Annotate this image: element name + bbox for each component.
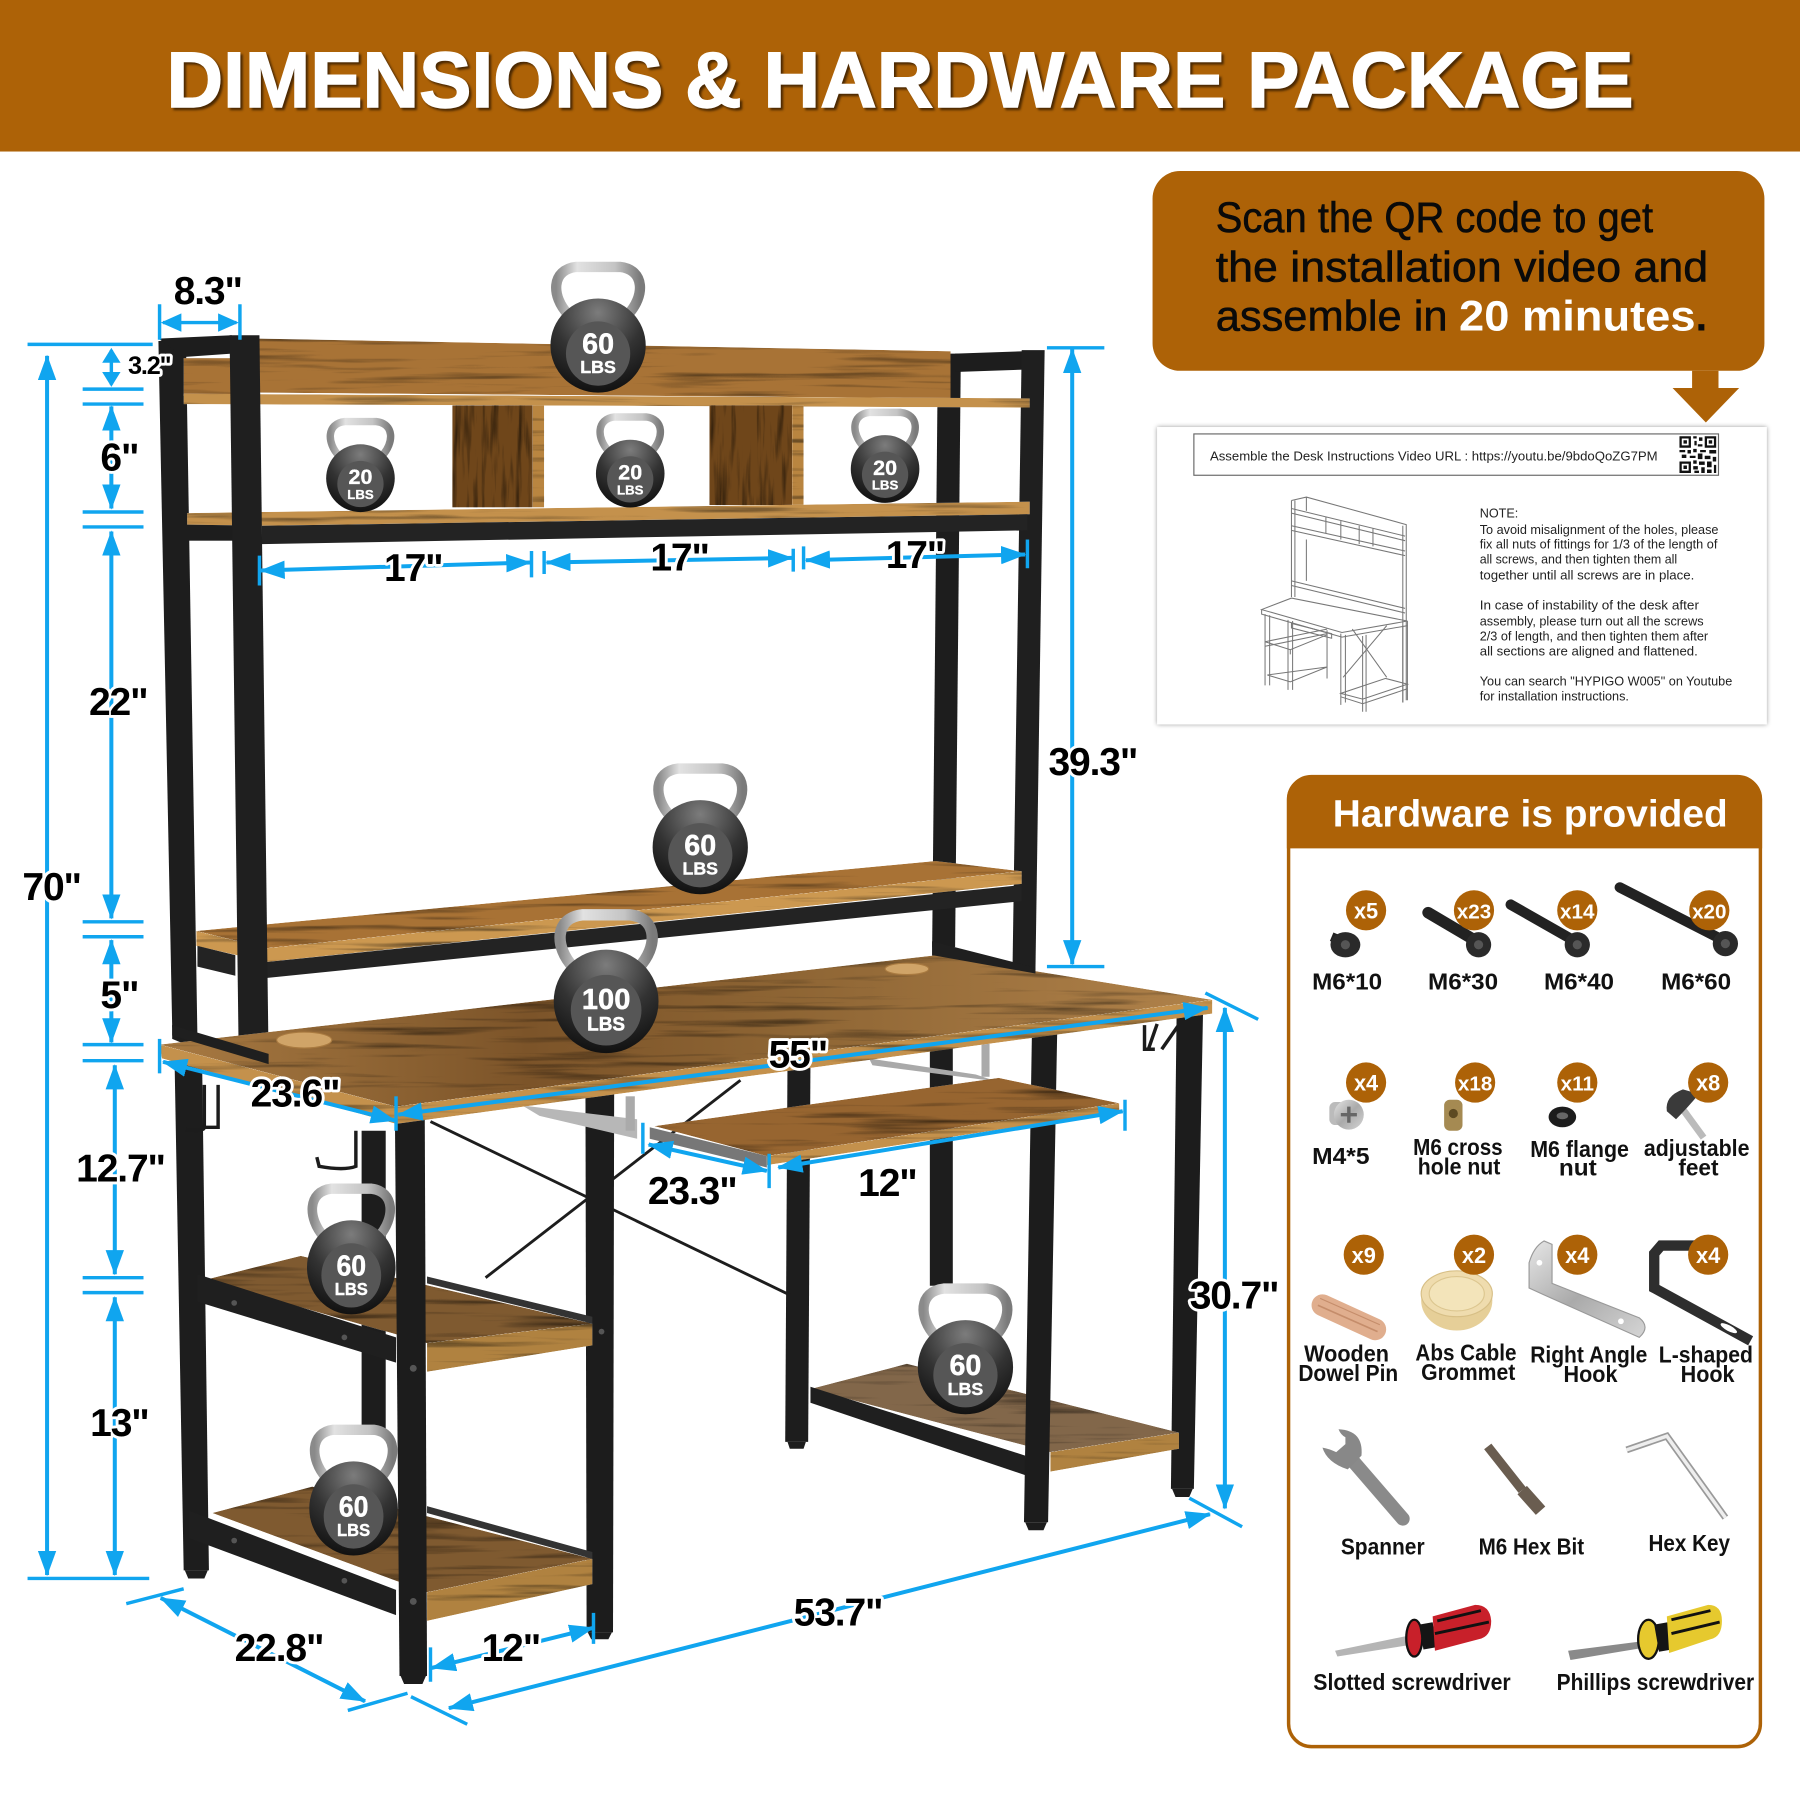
rear desk legs	[362, 1039, 953, 1449]
item: M6 cross hole nut	[1413, 1062, 1503, 1179]
lower left shelf	[189, 1487, 592, 1621]
item: L-shaped hook: Hook	[1681, 1361, 1735, 1387]
item: M6 hex bit	[1479, 1446, 1585, 1559]
item: M6 flange nut: x11	[1561, 1073, 1594, 1096]
kettlebell: 60 lbs top	[550, 267, 646, 393]
kettlebell: 60 lbs upper left shelf: LBS	[335, 1278, 368, 1299]
kettlebell: 60 lbs hutch shelf: 60	[684, 830, 716, 862]
dimension 12.7 in: 12.7"	[76, 1147, 165, 1190]
kettlebell: 20 lbs left: LBS	[347, 487, 374, 502]
kettlebell: 60 lbs upper left shelf: 60	[336, 1249, 366, 1282]
dimension 12 in shelf depth: 12"	[482, 1627, 540, 1670]
item: M6 cross hole nut: hole nut	[1418, 1153, 1501, 1179]
item: M6x40 bolt: x14	[1560, 900, 1595, 923]
kettlebell: 60 lbs right shelf: LBS	[948, 1379, 983, 1399]
dimension 55 in	[396, 1008, 1208, 1131]
note text: 2/3 of length, and then tighten them after	[1480, 630, 1708, 644]
item: abs cable grommet: x2	[1462, 1243, 1486, 1268]
callout: scan QR code: assemble in	[1216, 293, 1448, 340]
dimension 23.3 in: 23.3"	[648, 1170, 737, 1213]
item: spanner	[1322, 1429, 1425, 1559]
kettlebell: 60 lbs hutch shelf	[653, 769, 748, 894]
dimension 17 in right	[806, 534, 1027, 577]
item: wooden dowel pin: x9	[1352, 1243, 1376, 1268]
note text: assembly, please turn out all the screws	[1480, 615, 1704, 629]
item: M6x10 bolt	[1312, 890, 1386, 995]
item: right angle hook	[1529, 1235, 1647, 1387]
kettlebell: 20 lbs middle	[596, 417, 665, 507]
hutch front left post	[230, 335, 269, 1062]
dimension 22.8 in	[126, 1589, 408, 1710]
cubby dividers	[452, 405, 804, 507]
item: adjustable feet: feet	[1678, 1155, 1719, 1181]
middle and far right desk legs	[585, 1010, 1203, 1639]
item: M6 flange nut	[1530, 1062, 1629, 1181]
item: M6x10 bolt: x5	[1354, 898, 1378, 923]
kettlebell: 20 lbs right: 20	[873, 456, 897, 480]
right lower shelf	[810, 1364, 1179, 1475]
dimension 3.2 in: 3.2"	[128, 352, 171, 380]
kettlebell: 20 lbs right: LBS	[872, 478, 898, 493]
kettlebell: 60 lbs right shelf: 60	[949, 1350, 981, 1382]
dimension 5 in	[83, 940, 143, 1061]
item: L-shaped hook	[1654, 1235, 1753, 1387]
keyboard slide rails	[522, 1042, 996, 1139]
item: abs cable grommet	[1415, 1235, 1516, 1385]
item: wooden dowel pin	[1298, 1235, 1398, 1386]
panel: installation note card	[1157, 427, 1767, 724]
hutch base bar	[172, 941, 1035, 1064]
note text: together until all screws are in place.	[1480, 569, 1694, 583]
item: M6x40 bolt: M6*40	[1544, 969, 1614, 995]
arrow: callout to note card	[1673, 371, 1739, 422]
dimension 22 in: 22"	[89, 681, 147, 724]
item: M6 flange nut: nut	[1559, 1155, 1597, 1181]
dimension 70 in overall height: 70"	[22, 866, 81, 909]
dimension 17 in left: 17"	[384, 547, 442, 590]
item: M6 cross hole nut: M6 cross	[1413, 1134, 1503, 1160]
hutch lower shelf	[196, 861, 1022, 978]
dimension 17 in middle	[546, 537, 804, 580]
video URL box: Assemble the Desk Instructions Video URL : https://youtu.be/9bdoQoZG7PM	[1210, 448, 1658, 463]
kettlebell: 100 lbs desktop	[554, 915, 659, 1053]
item: spanner: Spanner	[1341, 1533, 1425, 1559]
hutch middle shelf	[187, 502, 1030, 526]
dimension lines and labels	[22, 270, 1278, 1724]
item: hex key	[1627, 1436, 1730, 1556]
dimension 70 in overall height	[22, 344, 153, 1578]
desk illustration	[158, 267, 1212, 1684]
dimension 22.8 in: 22.8"	[235, 1627, 323, 1670]
item: right angle hook: x4	[1565, 1243, 1589, 1268]
callout: scan QR code: Scan the QR code to get	[1216, 194, 1653, 241]
dimension 30.7 in: 30.7"	[1190, 1275, 1278, 1318]
dimension 8.3 in	[160, 270, 242, 340]
item: M4x5 screw: x4	[1354, 1071, 1378, 1096]
QR code	[1679, 436, 1716, 473]
kettlebell: 100 lbs desktop: 100	[582, 984, 630, 1016]
panel: hardware is provided	[1287, 776, 1762, 1747]
item: M6 cross hole nut: x18	[1458, 1073, 1492, 1096]
kettlebell: 60 lbs lower left shelf: 60	[339, 1491, 368, 1523]
item: L-shaped hook: x4	[1696, 1243, 1720, 1268]
kettlebell: 100 lbs desktop: LBS	[587, 1014, 625, 1035]
dimension 12 in tray	[778, 1100, 1125, 1205]
item: right angle hook: Hook	[1564, 1361, 1618, 1387]
note text: fix all nuts of fittings for 1/3 of the length of	[1480, 538, 1718, 552]
kettlebell: 20 lbs middle: LBS	[617, 482, 644, 497]
item: slotted screwdriver: Slotted screwdriver	[1313, 1669, 1511, 1695]
item: abs cable grommet: Grommet	[1421, 1359, 1516, 1385]
callout: scan QR code: the installation video and	[1216, 243, 1708, 290]
dimension 53.7 in	[411, 1514, 1210, 1724]
dimension 3.2 in	[83, 348, 171, 404]
hutch front right post	[1012, 350, 1045, 970]
item: adjustable feet: x8	[1696, 1071, 1720, 1096]
callout: scan QR code	[1153, 171, 1764, 371]
dimension 39.3 in	[1047, 348, 1137, 967]
hardware heading: Hardware is provided	[1333, 794, 1728, 836]
kettlebell: 20 lbs left	[326, 422, 395, 512]
item: M6x60 bolt	[1620, 887, 1738, 995]
note text: To avoid misalignment of the holes, please	[1480, 523, 1718, 537]
dimension 12 in tray: 12"	[858, 1162, 917, 1205]
note text: all screws, and then tighten them all	[1480, 553, 1677, 567]
dimension 39.3 in: 39.3"	[1049, 741, 1137, 784]
kettlebell: 20 lbs middle: 20	[618, 460, 642, 484]
item: M6x30 bolt	[1428, 890, 1498, 995]
kettlebell: 20 lbs right	[851, 412, 919, 503]
dimension 6 in: 6"	[100, 437, 138, 480]
note text: You can search "HYPIGO W005" on Youtube	[1480, 674, 1732, 688]
dimension 22 in	[83, 532, 147, 937]
item: Phillips screwdriver: Phillips screwdriver	[1557, 1669, 1754, 1695]
item: right angle hook: Right Angle	[1530, 1342, 1647, 1368]
dimension 17 in right: 17"	[886, 534, 944, 577]
item: wooden dowel pin: Wooden	[1304, 1340, 1389, 1366]
callout: scan QR code: .	[1696, 293, 1707, 340]
note text: all sections are aligned and flattened.	[1480, 644, 1698, 658]
dimension 6 in	[83, 406, 143, 527]
desktop	[160, 955, 1212, 1124]
dimension 8.3 in: 8.3"	[174, 270, 242, 313]
dimension 17 in left	[259, 547, 544, 590]
item: M4x5 screw: M4*5	[1312, 1143, 1370, 1169]
hardware heading	[1287, 776, 1762, 848]
item: M6x40 bolt	[1511, 890, 1614, 995]
hutch top back panel	[259, 339, 951, 398]
hutch rear left frame	[158, 335, 241, 1068]
kettlebell: 60 lbs right shelf	[918, 1289, 1013, 1414]
callout: scan QR code: 20 minutes	[1459, 293, 1696, 340]
side hooks	[186, 1024, 1178, 1169]
kettlebell: 60 lbs top: LBS	[580, 357, 616, 377]
dimension 5 in: 5"	[100, 974, 138, 1017]
kettlebell: 60 lbs lower left shelf	[309, 1430, 398, 1555]
item: hex key: Hex Key	[1648, 1530, 1730, 1556]
dimension 23.6 in: 23.6"	[251, 1073, 339, 1116]
dimension 55 in: 55"	[769, 1034, 827, 1077]
dimension 12.7 in	[76, 1065, 165, 1293]
kettlebell: 60 lbs hutch shelf: LBS	[682, 859, 718, 879]
item: M6 hex bit: M6 Hex Bit	[1479, 1533, 1585, 1559]
front desk legs	[395, 1027, 1057, 1684]
header banner	[0, 0, 1800, 152]
note text: In case of instability of the desk after	[1480, 599, 1699, 613]
item: M6x10 bolt: M6*10	[1312, 969, 1382, 995]
item: M6x30 bolt: x23	[1457, 900, 1491, 923]
item: M6x60 bolt: x20	[1692, 900, 1727, 923]
item: adjustable feet	[1644, 1062, 1749, 1181]
keyboard tray	[650, 1078, 1119, 1167]
item: slotted screwdriver	[1313, 1605, 1511, 1695]
kettlebell: 60 lbs upper left shelf	[307, 1189, 396, 1314]
upper left shelf	[197, 1256, 592, 1372]
dimension 30.7 in	[1189, 993, 1278, 1527]
dimension 23.6 in	[160, 1039, 395, 1120]
line drawing of desk	[1262, 497, 1407, 712]
title: DIMENSIONS & HARDWARE PACKAGE	[166, 35, 1634, 124]
X braces	[430, 1080, 790, 1295]
hutch top shelf	[184, 394, 1030, 408]
cable grommets	[277, 963, 929, 1048]
item: L-shaped hook: L-shaped	[1659, 1342, 1753, 1368]
dimension 12 in shelf depth	[430, 1613, 593, 1682]
item: M4x5 screw	[1312, 1062, 1386, 1169]
item: wooden dowel pin: Dowel Pin	[1298, 1360, 1398, 1386]
shelf bolts	[231, 1300, 604, 1605]
dimension 17 in middle: 17"	[650, 537, 709, 580]
item: M6x60 bolt: M6*60	[1661, 969, 1731, 995]
dimension 23.3 in	[643, 1123, 769, 1213]
hutch rear right post	[932, 351, 1024, 973]
item: abs cable grommet: Abs Cable	[1415, 1339, 1516, 1365]
kettlebell: 20 lbs left: 20	[349, 465, 372, 489]
note text: NOTE:	[1480, 507, 1518, 521]
left desk rear leg	[174, 1056, 209, 1578]
item: M6x30 bolt: M6*30	[1428, 969, 1498, 995]
note text: for installation instructions.	[1480, 689, 1629, 703]
dimension 13 in: 13"	[90, 1402, 149, 1445]
item: Phillips screwdriver	[1557, 1605, 1754, 1695]
dimension 53.7 in: 53.7"	[794, 1592, 882, 1635]
note text	[1480, 507, 1732, 703]
video URL box	[1194, 434, 1718, 475]
kettlebell: 60 lbs lower left shelf: LBS	[337, 1519, 370, 1540]
kettlebell: 60 lbs top: 60	[582, 329, 614, 361]
item: M6 flange nut: M6 flange	[1530, 1136, 1629, 1162]
item: adjustable feet: adjustable	[1644, 1135, 1749, 1161]
